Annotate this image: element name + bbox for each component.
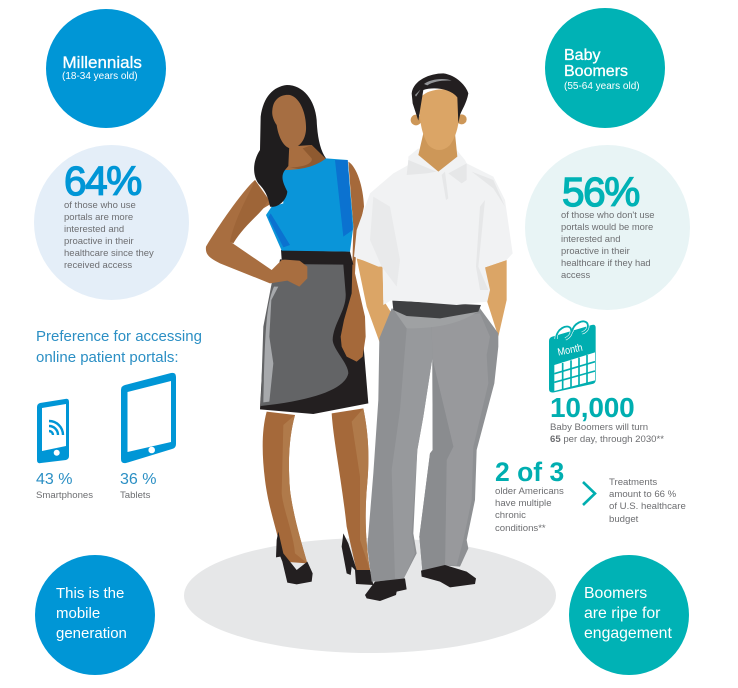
- icon: chevron arrow: [582, 481, 597, 506]
- icon: calendar: [549, 320, 596, 392]
- description: 64%: portals are more: [64, 212, 133, 223]
- floor shadow ellipse: [184, 538, 556, 653]
- description: 2 of 3: [495, 486, 564, 534]
- label: tablets: Tablets: [120, 490, 150, 501]
- stat: 56%: 56%: [562, 169, 639, 215]
- description: 56%: of those who don't use: [561, 209, 655, 220]
- callout: this is the mobile generation: [35, 555, 155, 675]
- description: 2 of 3: have multiple: [495, 498, 552, 509]
- description: treatments budget: amount to 66 %: [609, 489, 676, 500]
- callout text: boomers engagement: [584, 585, 672, 642]
- callout text: mobile generation: [56, 585, 127, 642]
- description: 56%: [561, 209, 655, 280]
- age range: Baby Boomers: (55-64 years old): [564, 81, 640, 92]
- callout text: mobile generation: mobile: [56, 605, 100, 622]
- description: 64%: [64, 200, 154, 271]
- circle: Baby Boomers heading: [545, 8, 665, 128]
- label: smartphones: Smartphones: [36, 490, 93, 501]
- panel: 56% stat circle: [525, 145, 690, 310]
- figure: man: [354, 73, 513, 601]
- heading: Baby Boomers: [564, 47, 628, 80]
- callout text: mobile generation: This is the: [56, 585, 124, 602]
- figure: woman: [206, 85, 373, 585]
- panel: 64% stat circle: [34, 145, 189, 300]
- description: treatments budget: Treatments: [609, 477, 657, 488]
- description: 64%: received access: [64, 260, 132, 271]
- heading: preference for accessing portals: Preference for accessing: [36, 328, 202, 345]
- stat: 2 of 3: 2 of 3: [495, 457, 564, 487]
- stat: 43% smartphones: 43 %: [36, 471, 72, 488]
- icon: tablet: [121, 372, 176, 464]
- description: 2 of 3: conditions**: [495, 523, 546, 534]
- description: 64%: healthcare since they: [64, 248, 154, 259]
- circle: Millennials heading: [46, 9, 166, 128]
- stat: 64%: 64%: [64, 158, 141, 204]
- callout text: boomers engagement: are ripe for: [584, 605, 660, 622]
- heading: Baby Boomers: Baby: [564, 47, 600, 64]
- description: 2 of 3: chronic: [495, 510, 526, 521]
- age range: Millennials: (18-34 years old): [62, 70, 138, 82]
- description: treatments budget: of U.S. healthcare: [609, 501, 686, 512]
- description: 2 of 3: older Americans: [495, 486, 564, 497]
- heading: preference for accessing portals: [36, 328, 202, 366]
- description: 56%: portals would be more: [561, 221, 653, 232]
- heading: Baby Boomers: Boomers: [564, 63, 628, 80]
- description: 10,000: [550, 422, 664, 445]
- description: 56%: healthcare if they had: [561, 257, 651, 268]
- description: treatments budget: [609, 477, 686, 525]
- description: 56%: interested and: [561, 233, 620, 244]
- stat: 36% tablets: 36 %: [120, 471, 156, 488]
- description: 64%: proactive in their: [64, 236, 134, 247]
- icon: smartphone: [37, 398, 69, 464]
- heading: Millennials: Millennials: [62, 52, 142, 72]
- description: 56%: proactive in their: [561, 245, 630, 256]
- description: 64%: of those who use: [64, 200, 136, 211]
- description: 10,000: 65 per day, through 2030**: [550, 434, 664, 445]
- description: 56%: access: [561, 269, 590, 280]
- description: treatments budget: budget: [609, 514, 638, 525]
- callout text: boomers engagement: Boomers: [584, 585, 647, 602]
- description: 10,000: Baby Boomers will turn: [550, 422, 648, 433]
- stat: 10,000: 10,000: [550, 392, 634, 423]
- heading: preference for accessing portals: online patient portals:: [36, 348, 179, 366]
- label: Month: Month: [557, 343, 584, 359]
- callout: boomers ripe for engagement: [569, 555, 689, 675]
- callout text: mobile generation: generation: [56, 625, 127, 642]
- callout text: boomers engagement: engagement: [584, 625, 672, 642]
- description: 64%: interested and: [64, 224, 124, 235]
